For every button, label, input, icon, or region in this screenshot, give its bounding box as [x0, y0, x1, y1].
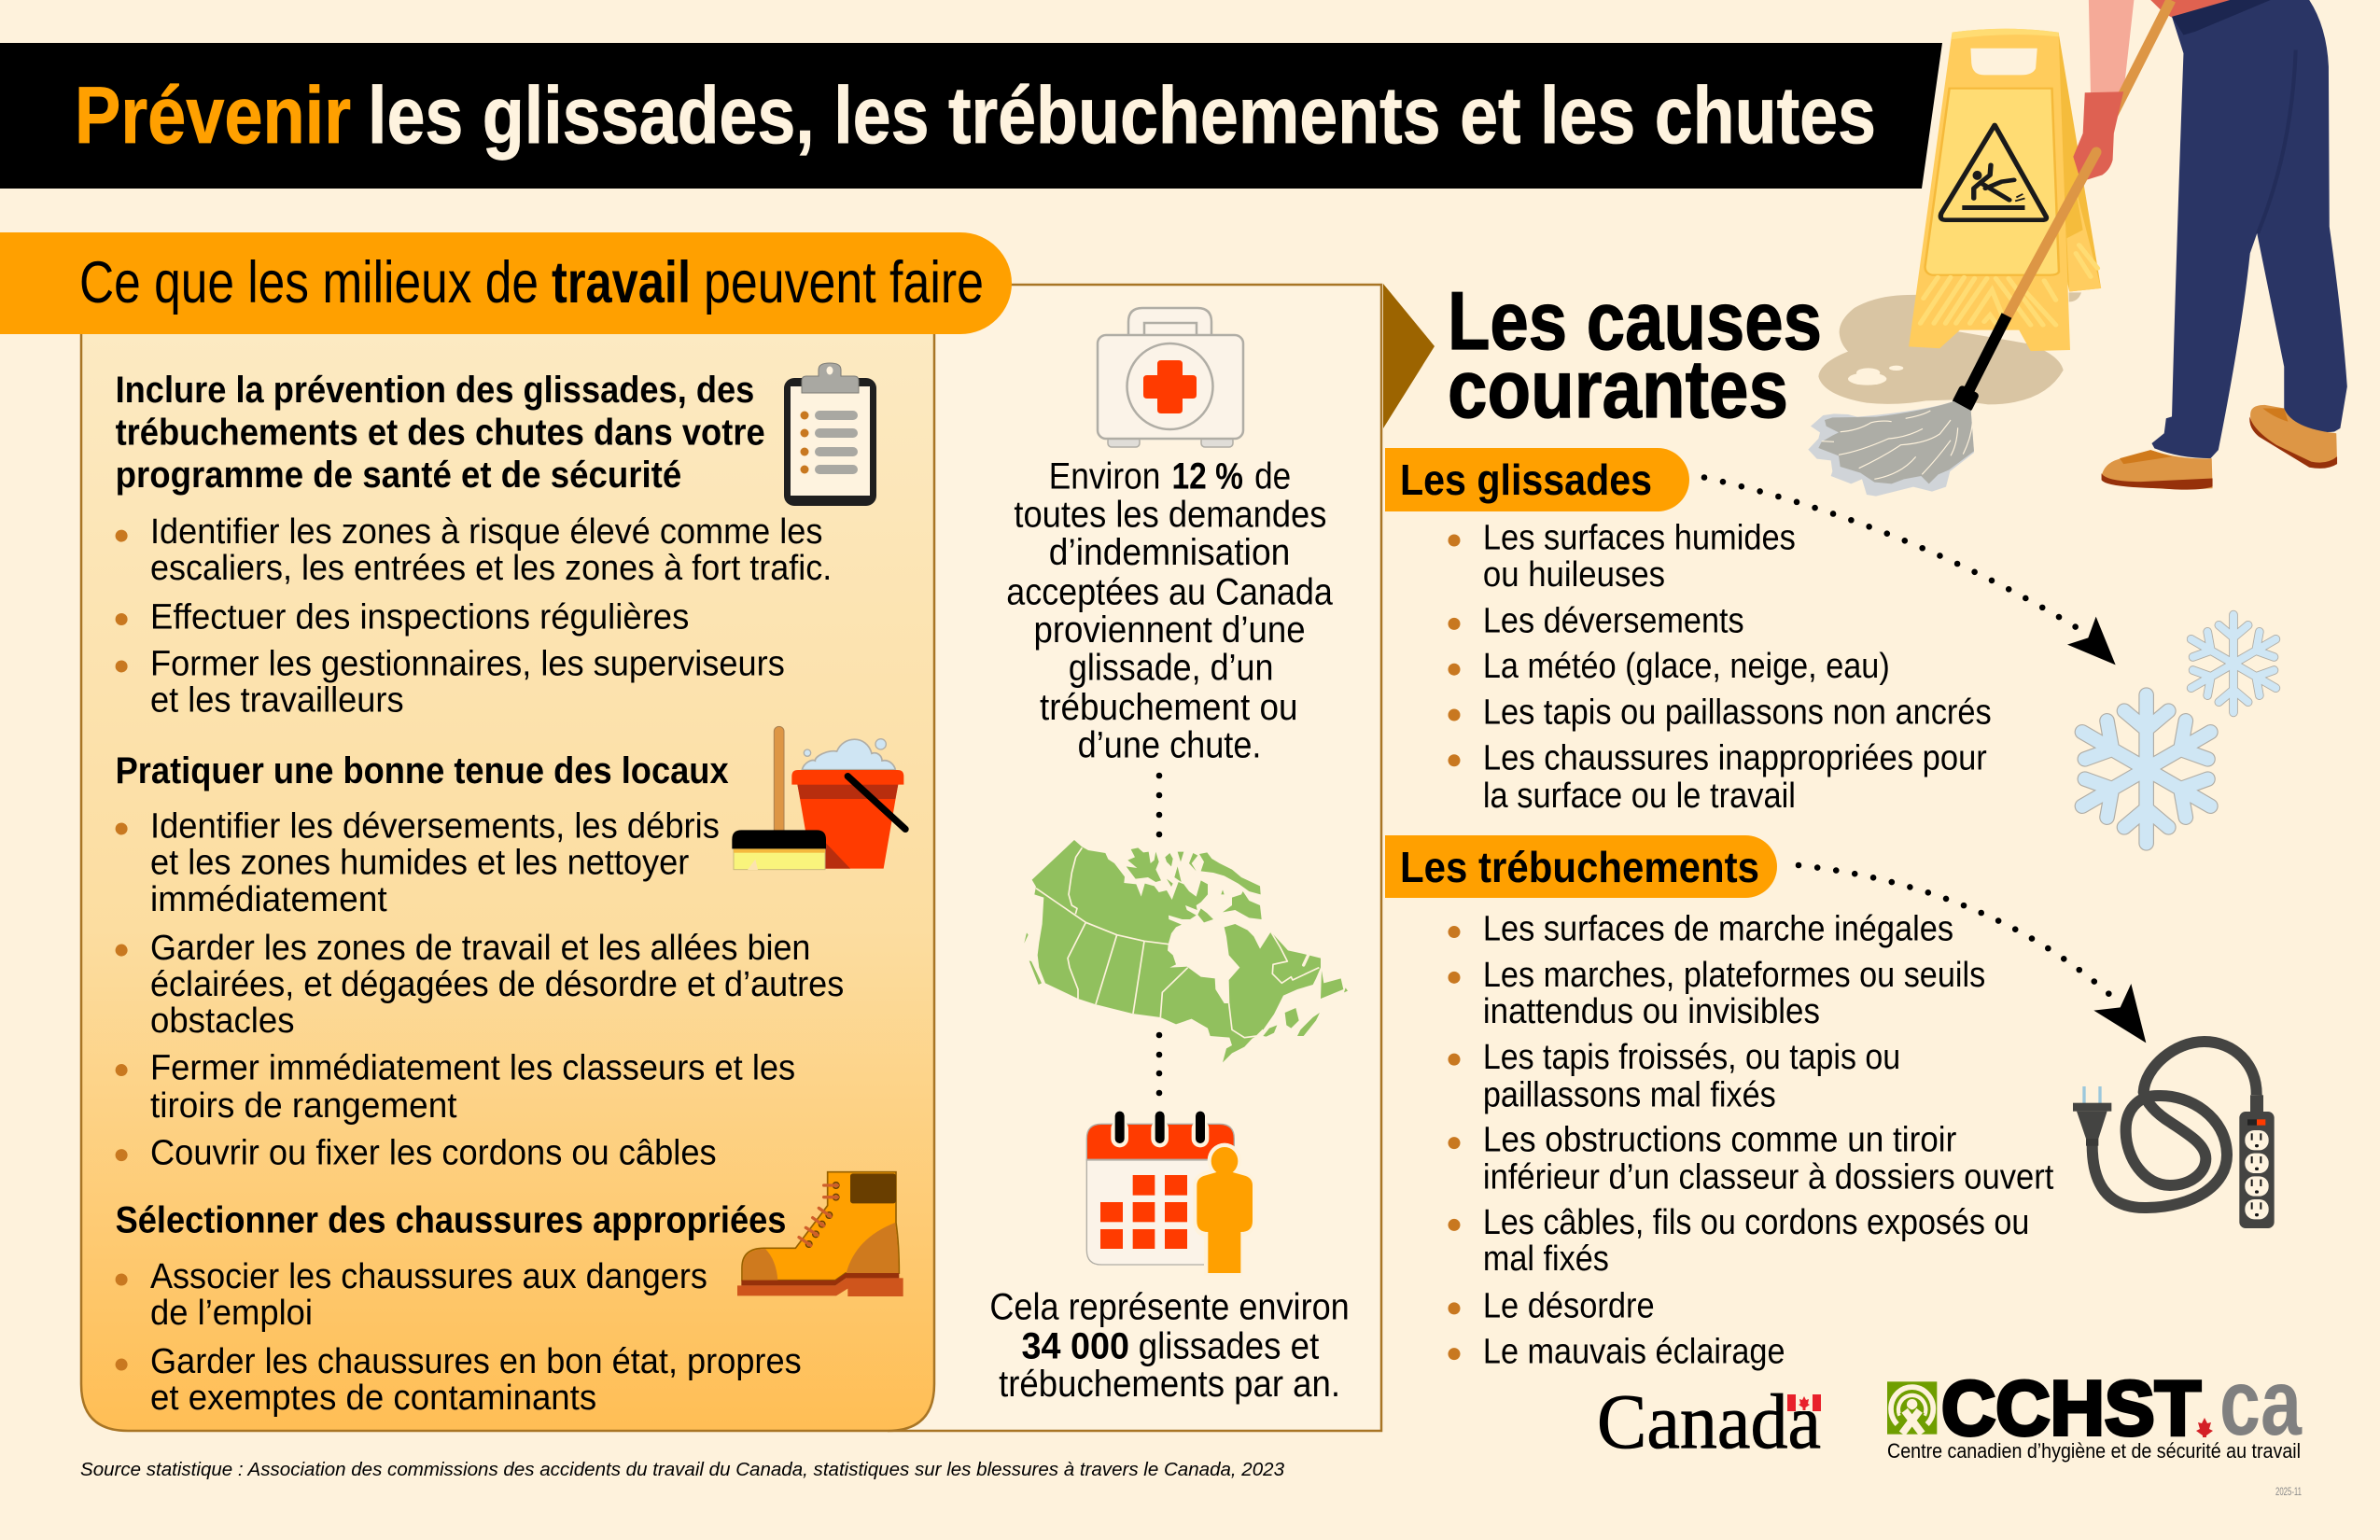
- logo domain: ca: [2219, 1351, 2303, 1455]
- text: 12 percent statistic: toutes les demandes: [1014, 494, 1326, 535]
- list: trips: inférieur d’un classeur à dossiers ouvert: [1483, 1156, 2054, 1197]
- text: 34 000 statistic: Cela représente environ: [989, 1286, 1350, 1327]
- banner shape: [0, 232, 1012, 334]
- text: 34 000 statistic: 34 000: [1021, 1326, 1129, 1367]
- heading: common causes: [1448, 274, 1822, 435]
- logo: CCHST: [1887, 1351, 2303, 1463]
- worker shoes: [2102, 405, 2337, 490]
- list: slips: Les chaussures inappropriées pour: [1483, 738, 1987, 778]
- mop handle: [1952, 152, 2096, 413]
- icon: first aid kit: [1098, 308, 1243, 447]
- text: 34 000 statistic: glissades et: [1139, 1326, 1319, 1367]
- list: footwear: de l’emploi: [150, 1293, 313, 1333]
- list: trips: Le mauvais éclairage: [1483, 1331, 1785, 1371]
- list: footwear: Associer les chaussures aux dangers: [150, 1256, 707, 1296]
- logo wordmark: CCHST: [1941, 1365, 2201, 1451]
- text: 12 percent statistic: trébuchement ou: [1040, 687, 1297, 728]
- list: trips: [1448, 908, 2054, 1371]
- list: footwear: Garder les chaussures en bon état, propres: [150, 1341, 802, 1381]
- subheading: trips: Les trébuchements: [1400, 843, 1759, 891]
- left column text: [116, 370, 844, 1418]
- dotted connector: text to map: [1156, 773, 1162, 837]
- panel: what workplaces can do: [81, 317, 934, 1431]
- list: prevention program: et les travailleurs: [150, 680, 404, 721]
- dotted arrow: trips to cord: [1799, 865, 2146, 1043]
- list: prevention program: Effectuer des inspections régulières: [150, 596, 689, 637]
- text: 12 percent statistic: Environ: [1049, 456, 1160, 497]
- heading: include prevention: Inclure la prévention des glissades, des: [116, 370, 754, 411]
- text: 12 percent statistic: acceptées au Canada: [1006, 571, 1334, 612]
- wet floor sign: [1909, 29, 2101, 351]
- icon: power bar with cord: [2073, 1042, 2275, 1228]
- icon: broom and bucket: [732, 726, 905, 870]
- banner heading: [79, 250, 984, 315]
- banner heading: travail: [552, 250, 691, 315]
- list: housekeeping: tiroirs de rangement: [150, 1085, 457, 1126]
- icon: clipboard: [784, 363, 876, 506]
- list: trips: Les tapis froissés, ou tapis ou: [1483, 1037, 1900, 1077]
- list: trips: mal fixés: [1483, 1239, 1609, 1279]
- title text: les glissades, les trébuchements et les chutes: [368, 71, 1876, 161]
- list: prevention program: escaliers, les entrées et les zones à fort trafic.: [150, 548, 832, 588]
- list: slips: Les surfaces humides: [1483, 518, 1796, 558]
- text: 12 percent statistic: glissade, d’un: [1069, 648, 1273, 689]
- heading: housekeeping: Pratiquer une bonne tenue des locaux: [116, 750, 729, 791]
- list: slips: Les déversements: [1483, 600, 1744, 640]
- source note: Source statistique : Association des commissions des accidents du travail du Canada, statistiques sur les blessures à travers le Canada, 2023: [80, 1459, 1285, 1480]
- list: prevention program: [116, 511, 832, 721]
- list: trips: Les surfaces de marche inégales: [1483, 908, 1953, 948]
- list: footwear: [116, 1256, 802, 1418]
- heading: common causes: Les causes: [1448, 274, 1822, 367]
- heading: common causes: courantes: [1448, 343, 1788, 435]
- text: 12 percent statistic: d’indemnisation: [1049, 532, 1290, 573]
- icon: work boot: [737, 1172, 903, 1296]
- text: 12 percent statistic: 12 %: [1172, 456, 1243, 497]
- list: slips: Les tapis ou paillassons non ancrés: [1483, 693, 1992, 733]
- title background: [0, 43, 1942, 189]
- list: slips: la surface ou le travail: [1483, 776, 1796, 816]
- panel: centre statistics frame: [888, 285, 1381, 1431]
- list: housekeeping: Fermer immédiatement les classeurs et les: [150, 1047, 795, 1087]
- maple leaf: [2196, 1418, 2213, 1437]
- text: 34 000 statistic: [989, 1286, 1350, 1405]
- puddle: [1818, 292, 2081, 404]
- list: housekeeping: immédiatement: [150, 879, 387, 919]
- list: housekeeping: [116, 806, 844, 1172]
- worker arm and shirt: [2089, 0, 2233, 93]
- list: prevention program: Former les gestionnaires, les superviseurs: [150, 644, 785, 684]
- title bar: [0, 43, 1942, 189]
- illustration: wet floor sign, mop and worker: [1808, 0, 2347, 497]
- panel: centre frame outline: [888, 285, 1381, 1431]
- icon: snowflakes: [2071, 615, 2283, 843]
- worker pants: [2151, 0, 2347, 458]
- dotted connector: map to calendar: [1156, 1032, 1162, 1096]
- list: housekeeping: Identifier les déversements, les débris: [150, 806, 720, 847]
- heading: footwear: Sélectionner des chaussures appropriées: [116, 1200, 786, 1241]
- mop head: [1808, 401, 1974, 497]
- mop handle upper: [2091, 0, 2171, 159]
- list: trips: Les câbles, fils ou cordons exposés ou: [1483, 1202, 2029, 1242]
- logo subtitle: Centre canadien d’hygiène et de sécurité au travail: [1887, 1439, 2301, 1463]
- list: trips: inattendus ou invisibles: [1483, 991, 1820, 1031]
- list: trips: paillassons mal fixés: [1483, 1075, 1776, 1115]
- logo: Canada wordmark: Canada: [1597, 1379, 1821, 1465]
- heading: include prevention: programme de santé et de sécurité: [116, 455, 681, 496]
- list: slips: [1448, 518, 1992, 816]
- banner heading: peuvent faire: [704, 250, 984, 315]
- text: 12 percent statistic: proviennent d’une: [1034, 609, 1306, 651]
- date code: 2025-11: [2275, 1487, 2302, 1498]
- banner heading: Ce que les milieux de: [79, 250, 539, 315]
- logo emblem: [1887, 1381, 1937, 1435]
- list: housekeeping: et les zones humides et les nettoyer: [150, 843, 690, 883]
- icon: calendar with person: [1086, 1112, 1255, 1276]
- list: housekeeping: Garder les zones de travail et les allées bien: [150, 928, 810, 968]
- list: housekeeping: Couvrir ou fixer les cordons ou câbles: [150, 1132, 717, 1172]
- list: slips: La météo (glace, neige, eau): [1483, 646, 1890, 686]
- heading: include prevention: trébuchements et des chutes dans votre: [116, 413, 765, 454]
- list: housekeeping: obstacles: [150, 1001, 295, 1041]
- text: 12 percent statistic: de: [1254, 456, 1291, 497]
- glove: [2073, 91, 2123, 182]
- section banner: what workplaces can do: [0, 232, 1012, 334]
- map of Canada: [1024, 840, 1348, 1062]
- dotted arrow: slips to snowflakes: [1704, 478, 2116, 665]
- list: trips: Les obstructions comme un tiroir: [1483, 1120, 1956, 1160]
- text: 34 000 statistic: trébuchements par an.: [999, 1364, 1340, 1405]
- text: 12 percent statistic: d’une chute.: [1078, 725, 1261, 766]
- heading: include prevention: [116, 370, 765, 496]
- list: trips: Le désordre: [1483, 1286, 1655, 1326]
- list: prevention program: Identifier les zones à risque élevé comme les: [150, 511, 822, 552]
- list: slips: ou huileuses: [1483, 554, 1665, 595]
- list: footwear: et exemptes de contaminants: [150, 1378, 596, 1418]
- subheading: slips: Les glissades: [1400, 455, 1652, 504]
- text: 12 percent statistic: [1006, 456, 1334, 766]
- title text: Prévenir: [75, 71, 351, 161]
- list: housekeeping: éclairées, et dégagées de désordre et d’autres: [150, 964, 844, 1004]
- arrow: section pointer: [1383, 284, 1435, 428]
- list: trips: Les marches, plateformes ou seuils: [1483, 955, 1985, 995]
